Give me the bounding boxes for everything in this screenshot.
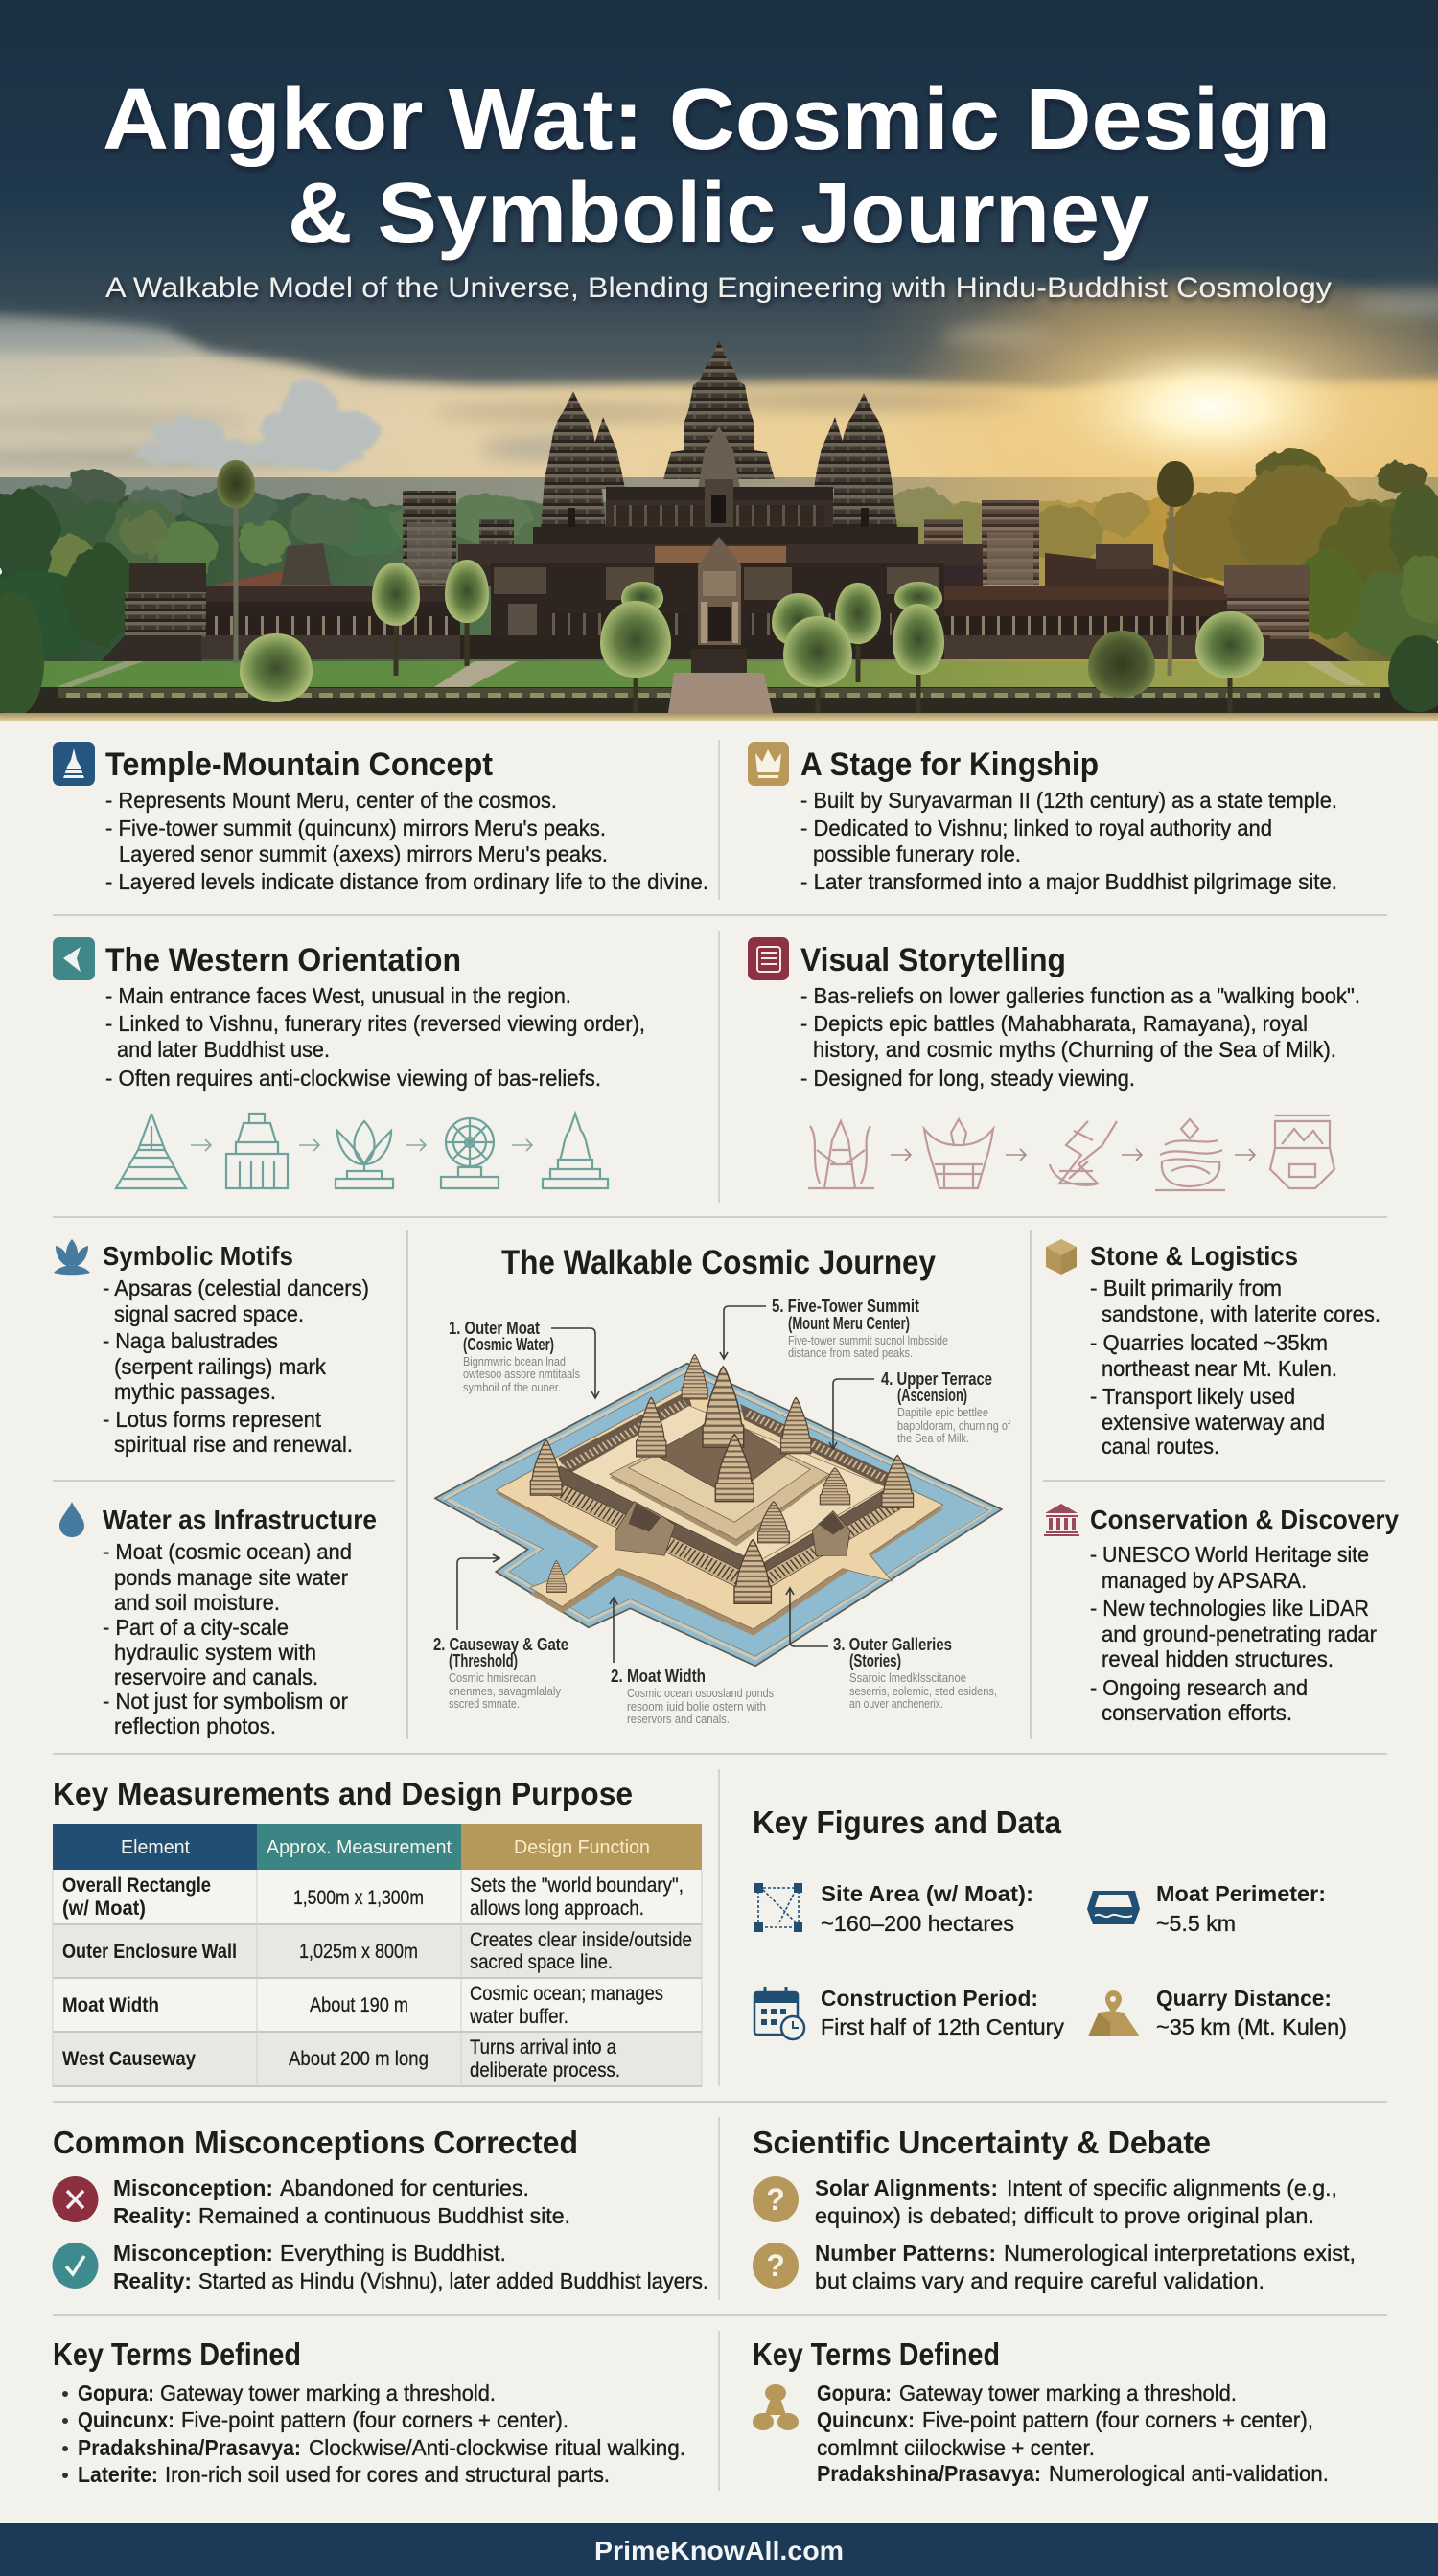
bullets: - UNESCO World Heritage site [1090,1542,1369,1567]
bullet list: Gopura: [78,2380,154,2405]
icon: book of reliefs [748,937,789,980]
title [103,72,1331,262]
subtitle: A Walkable Model of the Universe, Blending Engineering with Hindu-Buddhist Cosmology [105,272,1332,304]
callout 3: outer galleries: 3. Outer Galleries [833,1635,952,1654]
callout 2: moat width: resoom iuid bolie ostern with [627,1699,766,1714]
callout 4: upper terrace: Dapitile epic bettlee [897,1405,988,1419]
bullet list: Quincunx: [78,2407,174,2432]
bullets: - Built primarily from [1090,1276,1282,1300]
window details on corner towers [568,508,869,527]
table: (w/ Moat) [62,1898,146,1920]
central gate [655,537,786,645]
bullets: canal routes. [1102,1434,1219,1459]
bullets: ponds manage site water [114,1565,348,1590]
figure: moat perimeter: Moat Perimeter: [1156,1881,1326,1906]
item: solar alignments: equinox) is debated; difficult to prove original plan. [815,2203,1314,2228]
arrows between icons [191,1139,532,1151]
heading: Common Misconceptions Corrected [53,2125,578,2160]
bullets: - Represents Mount Meru, center of the cosmos. [105,788,557,813]
misconception 2: Reality: [113,2268,192,2293]
bullets: - Lotus forms represent [103,1407,322,1432]
arrows between scenes [891,1149,1255,1161]
bullets: sandstone, with laterite cores. [1102,1301,1380,1326]
heading: Water as Infrastructure [103,1505,377,1534]
misconception 1: Misconception: [113,2175,273,2200]
bullets [105,983,645,1091]
bullets: reflection photos. [114,1714,276,1738]
bullets: - Quarries located ~35km [1090,1330,1328,1355]
misconception 2: Misconception: [113,2241,273,2266]
bullets: northeast near Mt. Kulen. [1102,1356,1337,1381]
figure: quarry distance: Quarry Distance: [1156,1986,1332,2011]
table: Cosmic ocean; manages [470,1983,663,2005]
callout 4: upper terrace: (Ascension) [897,1386,967,1405]
bullets [1090,1542,1377,1725]
figure: quarry distance: ~35 km (Mt. Kulen) [1156,2014,1347,2039]
bullets: - Part of a city-scale [103,1615,289,1640]
callout 2: causeway and gate: 2. Causeway & Gate [433,1635,568,1654]
bullets: possible funerary role. [813,841,1021,866]
heading: Visual Storytelling [800,942,1066,978]
bullets: - Five-tower summit (quincunx) mirrors Meru's peaks. [105,816,606,840]
panel: Key Figures and Data [753,1805,1347,2039]
bullet list [62,2380,685,2487]
palm trees [0,460,1438,717]
table: Design Function [514,1837,650,1858]
misconception 2 [113,2241,708,2293]
forest [0,495,1438,671]
icon: lotus [54,1239,90,1275]
heading: A Stage for Kingship [800,747,1099,783]
panel: Scientific Uncertainty & Debate [753,2125,1356,2293]
term list [817,2380,1329,2486]
bullets: - Designed for long, steady viewing. [800,1066,1135,1091]
icon: question 2: ? [766,2248,785,2283]
table: Overall Rectangle [62,1874,211,1897]
footer: PrimeKnowAll.com [594,2536,844,2565]
lawn [29,661,1428,692]
sun glow [893,264,1438,551]
figure: moat perimeter: ~5.5 km [1156,1911,1236,1936]
item: number patterns [815,2241,1356,2293]
table: About 190 m [310,1994,408,2016]
balustrade wall [0,687,1438,713]
bullets: - Depicts epic battles (Mahabharata, Ramayana), royal [800,1011,1308,1036]
item: solar alignments: Solar Alignments: [815,2175,998,2200]
bullets: and ground-penetrating radar [1102,1622,1377,1646]
bullets [103,1276,369,1457]
misconception 1: Remained a continuous Buddhist site. [198,2203,570,2228]
callout 4: upper terrace: 4. Upper Terrace [881,1369,992,1389]
bullets: - Often requires anti-clockwise viewing of bas-reliefs. [105,1066,601,1091]
term list: Numerological anti-validation. [1049,2461,1329,2486]
panel: Temple-Mountain Concept [53,742,708,894]
bullet list: Clockwise/Anti-clockwise ritual walking. [309,2435,685,2460]
table: Creates clear inside/outside [470,1929,692,1951]
icon: check [52,2242,98,2288]
heading: Key Measurements and Design Purpose [53,1776,633,1811]
figure: site area: Site Area (w/ Moat): [821,1881,1033,1906]
cloud streaks [0,295,1438,468]
front walls [548,1466,752,1572]
item: number patterns: Number Patterns: [815,2241,996,2266]
table: Turns arrival into a [470,2036,616,2058]
icon: question 1: ? [766,2182,785,2217]
callout 5: five-tower summit [720,1297,948,1360]
bullets: and later Buddhist use. [117,1037,330,1062]
callout 1: outer moat: 1. Outer Moat [449,1319,540,1338]
isometric temple diagram [435,1354,1002,1666]
callout 2: causeway and gate [433,1554,568,1711]
bullets: - Main entrance faces West, unusual in the region. [105,983,571,1008]
callout 3: outer galleries: an ouver anchenerix. [849,1696,943,1711]
icon: stone block [1046,1239,1077,1275]
bullets: signal sacred space. [114,1301,304,1326]
heading: The Walkable Cosmic Journey [501,1244,936,1281]
heading: The Western Orientation [105,942,461,978]
panel: The Walkable Cosmic Journey [433,1244,1010,1726]
bullets [800,788,1337,894]
callout 1: outer moat: Bignmwric bcean lnad [463,1354,566,1368]
bullets: - Moat (cosmic ocean) and [103,1539,352,1564]
bullets: - Apsaras (celestial dancers) [103,1276,369,1300]
back walls [558,1392,692,1474]
term list: Pradakshina/Prasavya: [817,2461,1041,2486]
dark storm cloud [0,278,1438,385]
panel: The Western Orientation [53,937,645,1188]
table: deliberate process. [470,2059,620,2082]
bullets: hydraulic system with [114,1640,316,1665]
table: West Causeway [62,2048,196,2070]
long galleries [99,543,1355,664]
panel: Visual Storytelling [748,937,1360,1190]
gold band [0,713,1438,721]
upper gallery [606,487,833,529]
icon: stupa [53,742,95,786]
callout 3: outer galleries: (Stories) [849,1651,901,1670]
stepped pyramid [610,1423,829,1546]
bullets: Layered senor summit (axexs) mirrors Meru's peaks. [119,841,608,866]
icon: water drop [59,1502,84,1537]
table: allows long approach. [470,1898,644,1920]
callout 2: causeway and gate: Cosmic hmisrecan [449,1670,536,1685]
panel: Water as Infrastructure [59,1502,377,1738]
distant haze [0,477,1438,525]
callout 2: moat width: 2. Moat Width [611,1667,706,1686]
bullets [1090,1276,1380,1459]
term list: Quincunx: [817,2407,915,2432]
misconception 1: Reality: [113,2203,192,2228]
table: Outer Enclosure Wall [62,1941,237,1963]
icon: heritage building [1044,1504,1079,1536]
bullets: mythic passages. [114,1379,276,1404]
stepped mid roofs [533,527,918,548]
heading: Scientific Uncertainty & Debate [753,2125,1211,2160]
callout 1: outer moat: (Cosmic Water) [463,1335,554,1354]
callout 5: five-tower summit: Five-tower summit sucnol lmbsside [788,1333,948,1347]
icon: question 1 [753,2176,799,2222]
icon row: journey from tower to Buddha [116,1114,608,1188]
table [53,1824,702,2086]
heading: Conservation & Discovery [1090,1505,1399,1534]
bullets: - New technologies like LiDAR [1090,1596,1369,1621]
bullet list: Gateway tower marking a threshold. [160,2380,496,2405]
bullets [800,983,1360,1091]
panel: Common Misconceptions Corrected [52,2125,708,2293]
callout 5: five-tower summit: (Mount Meru Center) [788,1314,910,1333]
item: number patterns: but claims vary and require careful validation. [815,2268,1264,2293]
bullets: - Bas-reliefs on lower galleries function as a "walking book". [800,983,1360,1008]
central tower and flanking towers [541,340,897,529]
bullet list: Pradakshina/Prasavya: [78,2435,301,2460]
misconception 2: Everything is Buddhist. [280,2241,506,2266]
term list: Gopura: [817,2380,892,2405]
bullets: reveal hidden structures. [1102,1646,1334,1671]
bullet list: Five-point pattern (four corners + center). [181,2407,568,2432]
figure: moat perimeter [1087,1881,1326,1936]
item: solar alignments: Intent of specific alignments (e.g., [1007,2175,1337,2200]
bullets: managed by APSARA. [1102,1568,1307,1593]
bullets: conservation efforts. [1102,1700,1292,1725]
callout 5: five-tower summit: 5. Five-Tower Summit [772,1297,919,1316]
figure: construction period [754,1986,1064,2039]
callout 2: moat width: Cosmic ocean osoosland ponds [627,1686,774,1700]
icon: quincunx nodes [753,2384,799,2430]
heading: Key Figures and Data [753,1805,1062,1840]
panel: Key Terms Defined (right) [753,2336,1329,2486]
panel: Stone & Logistics [1046,1239,1380,1459]
heading: Stone & Logistics [1090,1241,1298,1271]
panel: Symbolic Motifs [54,1239,369,1457]
icon: question 2 [753,2242,799,2288]
table: About 200 m long [289,2048,429,2070]
title: & Symbolic Journey [288,166,1149,262]
callout 3: outer galleries [786,1588,997,1711]
title: Angkor Wat: Cosmic Design [103,72,1331,168]
panel: A Stage for Kingship [748,742,1337,894]
cumulus clouds [134,380,381,469]
icon: west-facing speaker [53,937,95,980]
bullets: - Transport likely used [1090,1384,1295,1409]
icon row: bas-relief scenes [808,1116,1334,1190]
bullets: - Naga balustrades [103,1328,278,1353]
figure: site area [754,1881,1033,1936]
term list: Gateway tower marking a threshold. [899,2380,1237,2405]
icon: cross [52,2176,98,2222]
bullets: - Not just for symbolism or [103,1689,348,1714]
outer gopura towers [403,491,456,585]
callout 2: causeway and gate: cnenmes, savagmlalaly [449,1684,561,1698]
bullets: spiritual rise and renewal. [114,1432,353,1457]
bullets: (serpent railings) mark [114,1354,326,1379]
figure: site area: ~160–200 hectares [821,1911,1014,1936]
heading: Key Terms Defined [753,2336,1000,2372]
bullets: - Built by Suryavarman II (12th century) as a state temple. [800,788,1337,813]
callout 3: outer galleries: seserris, eolemic, sted esidens, [849,1684,997,1698]
item: number patterns: Numerological interpretations exist, [1004,2241,1356,2266]
figure: quarry distance [1088,1986,1347,2039]
table: sacred space line. [470,1951,613,1973]
icon: crown [748,742,789,786]
callout 1: outer moat [449,1319,599,1398]
front gopuras [615,1502,675,1555]
table: Approx. Measurement [267,1837,452,1858]
bullets: reservoire and canals. [114,1665,318,1690]
panel: Conservation & Discovery [1044,1504,1399,1725]
bullets: - Layered levels indicate distance from ordinary life to the divine. [105,869,708,894]
heading: Key Terms Defined [53,2336,301,2372]
figure: construction period: Construction Period: [821,1986,1038,2011]
table: 1,025m x 800m [299,1941,418,1963]
panel: Key Measurements and Design Purpose [53,1776,702,2086]
table: Moat Width [62,1994,159,2016]
callout 2: moat width [610,1598,774,1726]
callout 2: moat width: reservors and canals. [627,1712,730,1726]
callout 1: outer moat: symboil of the ouner. [463,1380,561,1394]
callout 5: five-tower summit: distance from sated peaks. [788,1346,913,1360]
heading: Temple-Mountain Concept [105,747,493,783]
term list: comlmnt ciilockwise + center. [817,2435,1095,2460]
misconception 1: Abandoned for centuries. [280,2175,529,2200]
callout 4: upper terrace: bapoldoram, churning of [897,1418,1010,1433]
callout 3: outer galleries: Ssaroic lmedklsscitanoe [849,1670,966,1685]
panel: Key Terms Defined (left) [53,2336,685,2487]
inner court [568,1406,886,1562]
heading: Symbolic Motifs [103,1241,293,1271]
table: Sets the "world boundary", [470,1874,684,1897]
bullets: and soil moisture. [114,1590,280,1615]
callout 4: upper terrace: the Sea of Milk. [897,1431,969,1445]
bullets: - Later transformed into a major Buddhist pilgrimage site. [800,869,1337,894]
misconception 1 [113,2175,570,2228]
callout 2: causeway and gate: sscred smnate. [449,1696,520,1711]
bullets: - Linked to Vishnu, funerary rites (reversed viewing order), [105,1011,645,1036]
bullets: - Ongoing research and [1090,1675,1308,1700]
callout 4: upper terrace [829,1369,1010,1449]
callout 2: causeway and gate: (Threshold) [449,1651,518,1670]
hero photo: Angkor Wat at sunrise [0,0,1438,721]
misconception 2: Started as Hindu (Vishnu), later added Buddhist layers. [198,2268,708,2293]
bullet list: Laterite: [78,2462,158,2487]
causeway [668,673,773,713]
term list: Five-point pattern (four corners + center), [922,2407,1313,2432]
callout 1: outer moat: owtesoo assore nmtitaals [463,1367,580,1381]
bullets: - Dedicated to Vishnu; linked to royal authority and [800,816,1272,840]
figure: construction period: First half of 12th Century [821,2014,1064,2039]
bullets: history, and cosmic myths (Churning of the Sea of Milk). [813,1037,1336,1062]
table: water buffer. [469,2006,568,2028]
table: Element [121,1837,190,1858]
bullet list: Iron-rich soil used for cores and structural parts. [165,2462,610,2487]
footer [0,2523,1438,2576]
bullets [103,1539,352,1738]
bullets: extensive waterway and [1102,1410,1325,1435]
bullets [105,788,708,894]
item: solar alignments [815,2175,1337,2228]
table: 1,500m x 1,300m [293,1887,424,1909]
stairs [691,649,747,674]
